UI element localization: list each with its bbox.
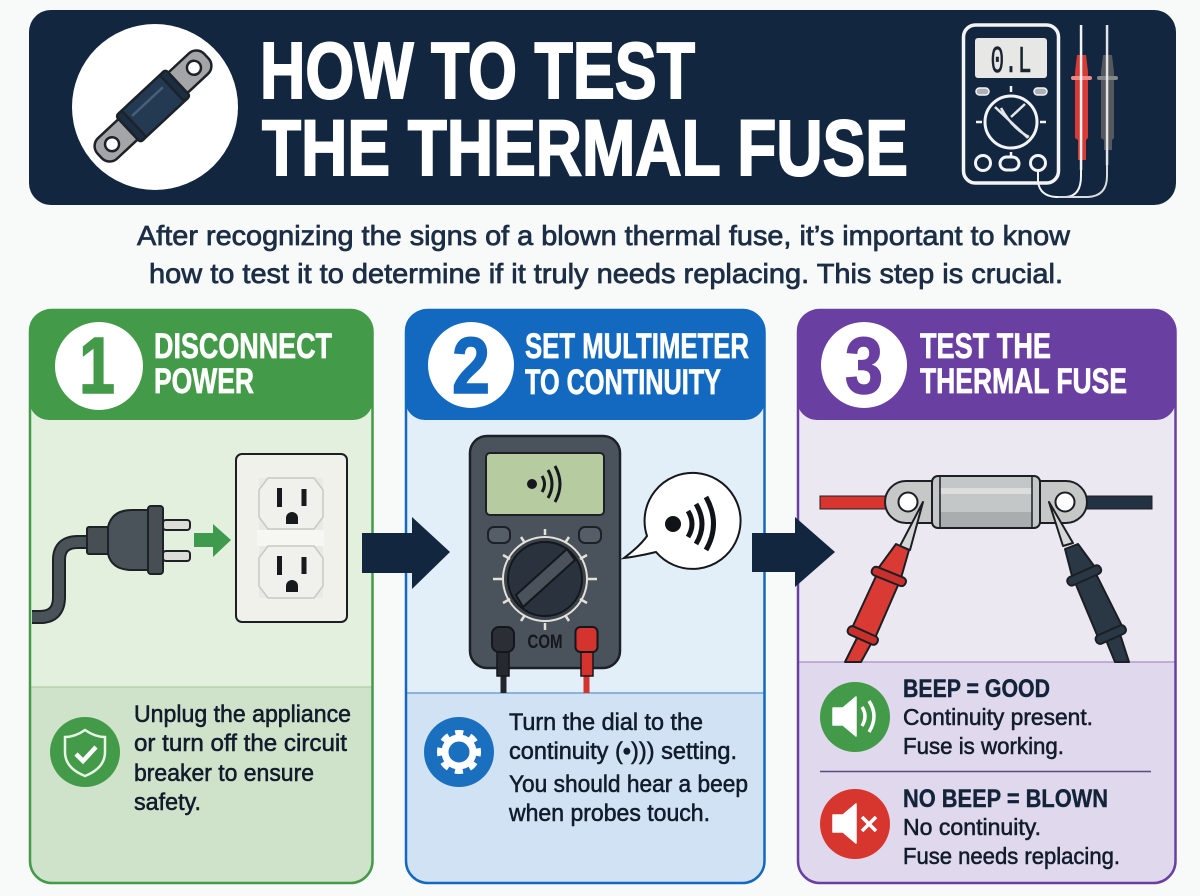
step 2 header: 2 [452, 321, 490, 410]
step 2 description: continuity (•))) setting. [509, 738, 737, 765]
panel: step 3 test the thermal fuse [797, 310, 1176, 883]
arrow: step 1 to step 2 [362, 517, 450, 589]
intro text: After recognizing the signs of a blown thermal fuse, it’s important to know [137, 220, 1071, 251]
intro text [137, 220, 1071, 289]
step 1 description: Unplug the appliance [134, 701, 351, 728]
title: THE THERMAL FUSE [262, 103, 908, 192]
step 2 header: TO CONTINUITY [525, 363, 721, 402]
step 3 header: TEST THE [920, 327, 1051, 366]
icon: thermal fuse [72, 24, 238, 190]
step 1 header: POWER [154, 362, 254, 401]
arrow: green [194, 524, 231, 557]
red probe [845, 502, 923, 662]
icon: no beep blown [820, 789, 890, 859]
step 1 description: breaker to ensure [134, 760, 314, 787]
black probe [1049, 502, 1129, 662]
result: no beep blown: NO BEEP = BLOWN [903, 785, 1108, 813]
result: beep good: BEEP = GOOD [903, 675, 1050, 703]
icon: multimeter with probes: 0.L [990, 41, 1032, 84]
result: no beep blown: Fuse needs replacing. [903, 843, 1120, 869]
icon: plug [32, 506, 190, 617]
title: HOW TO TEST [260, 26, 695, 115]
result: beep good: Continuity present. [903, 704, 1093, 730]
step 2 header [405, 310, 765, 420]
result: beep good [903, 675, 1093, 759]
step 2 description [508, 709, 748, 827]
arrow: step 2 to step 3 [752, 517, 835, 587]
step 2 description: Turn the dial to the [509, 709, 703, 736]
callout: continuity symbol [624, 473, 741, 569]
panel: step 2 set multimeter [405, 310, 765, 883]
step 3 header [797, 310, 1176, 420]
icon: multimeter with probes [964, 25, 1118, 197]
header banner [29, 10, 1176, 205]
step 3 header: 3 [845, 321, 883, 410]
icon: beep good [820, 682, 890, 752]
result: beep good: Fuse is working. [903, 733, 1064, 759]
step 2 description: when probes touch. [508, 800, 710, 827]
icon: digital multimeter: COM [528, 632, 562, 653]
step 1 header [29, 310, 373, 420]
step 1 header: 1 [79, 321, 115, 410]
title [260, 26, 908, 192]
step 1 description: safety. [134, 789, 201, 816]
icon: digital multimeter [470, 436, 620, 693]
step 3 header: THERMAL FUSE [920, 362, 1127, 401]
step 1 description: or turn off the circuit [134, 730, 347, 757]
panel: step 1 disconnect power [29, 310, 373, 883]
icon: wall outlet [236, 454, 347, 622]
icon: gear [424, 717, 494, 787]
result: no beep blown: No continuity. [903, 814, 1041, 840]
step 2 header: SET MULTIMETER [525, 327, 749, 366]
icon: shield check [50, 717, 120, 787]
step 1 description [134, 701, 351, 816]
step 1 header: DISCONNECT [154, 327, 332, 366]
icon: fuse with wires [820, 476, 1152, 528]
step 2 description: You should hear a beep [509, 771, 748, 798]
result: no beep blown [903, 785, 1120, 869]
intro text: how to test it to determine if it truly needs replacing. This step is crucial. [149, 258, 1063, 289]
